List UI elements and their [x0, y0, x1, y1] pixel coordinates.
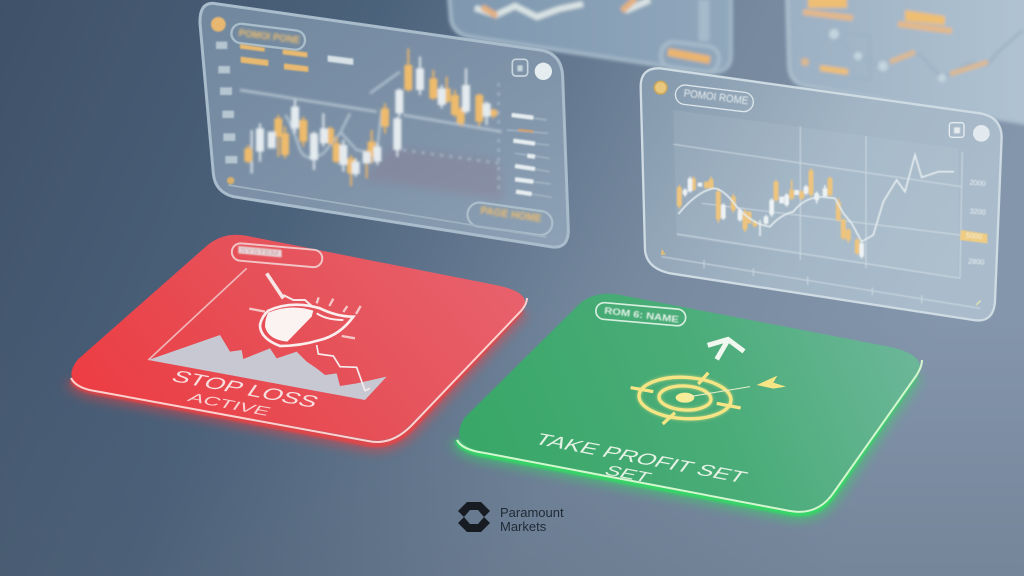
- icon: up arrow: [708, 339, 744, 359]
- status pill: stop loss: SYSTEM: [240, 246, 279, 258]
- header pill: left chart: POMOI PONE: [238, 28, 301, 47]
- icon: arrowhead: [757, 376, 786, 389]
- logo text: Paramount: [500, 505, 564, 520]
- controls: left chart: [512, 59, 552, 80]
- footer pill: left chart: PAGE HOME: [480, 204, 543, 225]
- card edge highlight: green: [457, 360, 922, 512]
- panel: stop loss card: [71, 235, 527, 442]
- axis and header labels: left chart: [216, 42, 353, 163]
- status pill: stop loss: [231, 243, 323, 268]
- label: stop loss: STOP LOSS: [167, 368, 322, 412]
- logo mark: [458, 502, 490, 532]
- footer pill: left chart: [466, 201, 554, 237]
- icon: shield: [249, 273, 361, 346]
- back panel: top centre chart: [449, 0, 731, 73]
- chart axis: stop loss: [148, 268, 247, 360]
- icon: target: [631, 373, 750, 424]
- glow: green card: [457, 374, 916, 514]
- card edge highlight: red: [71, 298, 527, 442]
- candlesticks: right chart: [679, 168, 862, 258]
- candlesticks: left chart: [240, 48, 502, 190]
- timeline: left chart: [227, 177, 547, 237]
- header: right chart: [654, 81, 754, 113]
- logo: Paramount Markets: [458, 502, 564, 534]
- price labels: right chart: [960, 178, 987, 267]
- back panel: top right chart: [787, 0, 1024, 124]
- axis markers: right chart: [661, 248, 981, 305]
- gridlines: right chart: [662, 127, 980, 308]
- chart plot area: [673, 110, 958, 278]
- price line: right chart: [678, 155, 954, 242]
- header pill: left chart: [211, 17, 306, 51]
- glow: red card: [72, 310, 522, 445]
- falling mountain chart: stop loss: [148, 335, 387, 400]
- status pill: take profit: [595, 302, 686, 326]
- controls: right chart: [949, 123, 990, 142]
- label: take profit set: TAKE PROFIT SET: [531, 430, 752, 486]
- label: set: SET: [601, 463, 655, 485]
- header: right chart: POMOI ROME: [683, 88, 749, 108]
- label: active: ACTIVE: [184, 391, 273, 419]
- status pill: take profit: ROM 6: NAME: [604, 305, 679, 324]
- price labels: right chart: 2000: [969, 178, 986, 188]
- panel: take profit card: [457, 294, 922, 512]
- falling price line: stop loss: [317, 345, 370, 391]
- price labels: right chart: 2800: [968, 256, 985, 267]
- tint: chart glow: [363, 147, 503, 200]
- price labels: right chart: 5000: [965, 231, 983, 241]
- price labels: right chart: 3200: [969, 206, 986, 217]
- panel: right line and candle chart: [641, 68, 1002, 320]
- right side indicators: left chart: [507, 115, 552, 197]
- logo: Paramount Markets: Markets: [500, 519, 547, 534]
- panel: left candlestick chart: [200, 3, 568, 247]
